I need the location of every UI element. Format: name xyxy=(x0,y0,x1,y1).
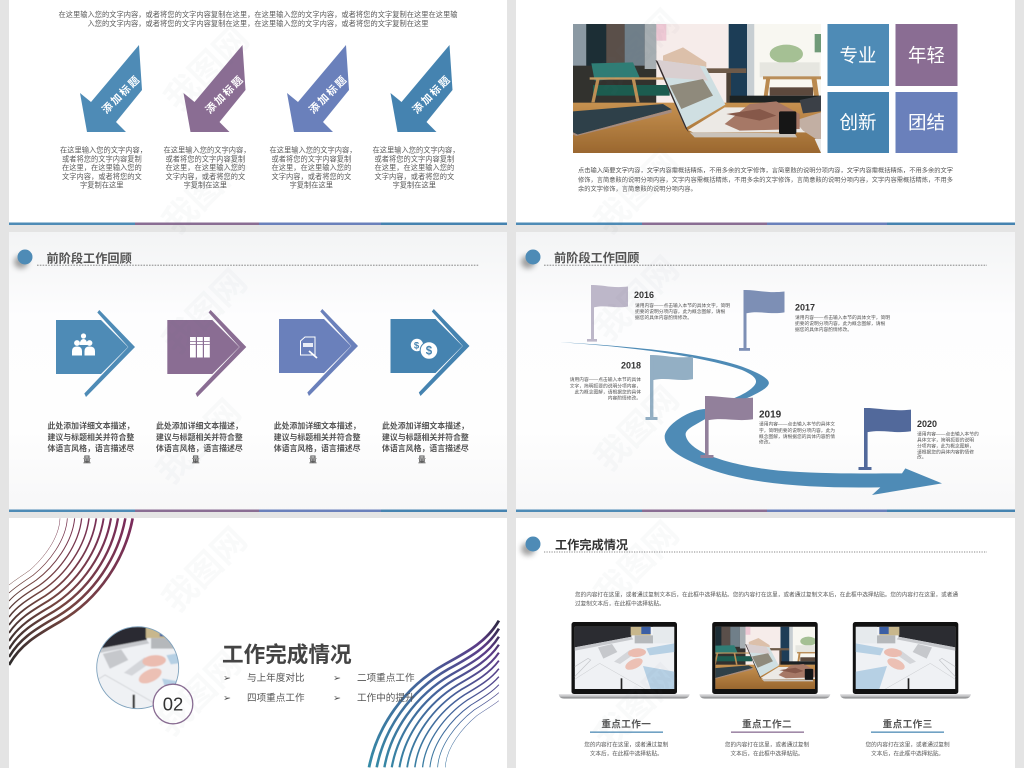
text 2017 xyxy=(795,302,890,333)
arrow 3 caption: 文字内容，或者将您的文 xyxy=(272,172,351,181)
text 2016: 2016 xyxy=(634,290,654,300)
watermark: 我图网 xyxy=(156,521,255,620)
text 2017: 2017 xyxy=(795,302,815,312)
arrow 1 caption xyxy=(60,146,147,190)
bullet list: 工作中的提升 xyxy=(357,692,415,704)
arrow 2 caption: 在这里，在这里输入您的 xyxy=(166,163,245,172)
item 2 label: 文本后，在此框中选择粘贴。 xyxy=(731,750,803,758)
tile: 创新 xyxy=(828,92,889,153)
arrow 3 caption: 在这里输入您的文字内容， xyxy=(270,146,357,154)
arrow 3 caption: 在这里，在这里输入您的 xyxy=(272,163,351,172)
text 2017: 扼要的说明分项内容，此为概念图解，请根 xyxy=(795,320,886,327)
arrow 4 caption: 或者将您的文字内容复制 xyxy=(374,154,454,164)
arrow 2 caption: 体语言风格，语言描述尽 xyxy=(156,443,243,453)
watermark: 我图网 xyxy=(156,143,255,242)
arrow 3 caption xyxy=(274,420,361,464)
arrow 2 with binders icon xyxy=(167,310,246,397)
arrow 1 with people icon xyxy=(56,310,135,397)
arrow 3 caption: 字复制在这里 xyxy=(290,180,333,190)
description text: 修饰，言简意赅的说明分项内容，文字内容需概括精炼，不用多余的文字修饰，言简意赅的说明分项内容，文字内容需概括精炼，不用多 xyxy=(578,175,953,184)
panel: slide 3, arrows with icons xyxy=(9,232,507,512)
laptop 1 xyxy=(559,622,690,698)
text 2017: 请用内容——点击输入本节的具体文字，简明 xyxy=(795,314,890,321)
text 2018: 此为概念图解，请根据您的具体 xyxy=(574,388,641,395)
watermark xyxy=(150,3,687,757)
watermark: 我图网 xyxy=(588,143,687,242)
text 2016: 请用内容——点击输入本节的具体文字，简明 xyxy=(635,302,730,309)
text 2018 xyxy=(570,360,641,401)
bullet list: 与上年度对比 xyxy=(247,672,305,684)
intro text: 过复制文本后，在此框中选择粘贴。 xyxy=(575,600,665,608)
heading marker xyxy=(521,536,540,556)
arrow 4 xyxy=(390,45,454,132)
tile: 专业: 专业 xyxy=(839,45,877,66)
watermark: 我图网 xyxy=(588,250,687,349)
heading marker xyxy=(14,250,32,268)
watermark: 我图网 xyxy=(158,20,257,119)
icon: binders xyxy=(190,337,210,358)
arrow 4 caption: 在这里输入您的文字内容， xyxy=(372,146,460,154)
text 2018: 文字，简明扼要的说明分项内容， xyxy=(570,382,641,389)
flag 2019 xyxy=(700,396,753,458)
heading: 前阶段工作回顾 xyxy=(554,250,639,265)
text 2019: 修改。 xyxy=(759,438,773,446)
text 2016 xyxy=(634,290,730,321)
arrow 3 caption: 体语言风格，语言描述尽 xyxy=(274,443,361,453)
arrow 3 xyxy=(287,45,350,132)
arrow 4 with coins icon xyxy=(390,309,470,396)
text 2020: 请根据您的具体内容酌情修 xyxy=(917,448,974,455)
arrow 2 caption: 量 xyxy=(192,456,200,464)
arrow 2 caption: 此处添加详细文本描述， xyxy=(156,420,243,430)
item 3 label: 文本后，在此框中选择粘贴。 xyxy=(871,750,944,758)
arrow 3 caption: 量 xyxy=(309,456,317,464)
heading marker xyxy=(521,250,540,268)
arrow 4 caption xyxy=(382,420,469,464)
text 2019: 2019 xyxy=(759,410,782,420)
tile: 年轻 xyxy=(896,24,958,86)
intro text xyxy=(58,10,458,28)
bullet list xyxy=(223,672,415,704)
arrow 1 caption: 体语言风格，语言描述尽 xyxy=(48,443,134,453)
arrow 2 caption xyxy=(156,420,243,464)
watermark: 我图网 xyxy=(150,645,249,744)
bullet list: 四项重点工作 xyxy=(247,692,305,704)
arrow 4 caption: 建议与标题相关并符合整 xyxy=(382,432,469,442)
section number: 02 xyxy=(163,694,183,714)
arrow 1 xyxy=(80,45,143,132)
arrow 4 caption: 字复制在这里 xyxy=(392,180,436,190)
text 2020: 分项内容，此为概念图解， xyxy=(917,442,974,449)
watermark: 我图网 xyxy=(588,3,687,102)
text 2018: 请用内容——点击输入本节的具体 xyxy=(570,376,641,383)
arrow 1 caption: 或者将您的文字内容复制 xyxy=(62,154,142,164)
arrow 2: 添加标题 xyxy=(203,72,247,116)
bullet list: ➢ xyxy=(333,693,341,704)
decorative wave lines bottom right xyxy=(369,621,499,767)
arrow 3: 添加标题 xyxy=(306,72,350,116)
laptop 2 xyxy=(699,622,830,698)
section title: 工作完成情况 xyxy=(222,642,352,667)
arrow 3 caption: 此处添加详细文本描述， xyxy=(274,420,361,430)
item 2 label xyxy=(725,718,809,758)
arrow 1 caption: 字复制在这里 xyxy=(80,180,124,190)
arrow 3 caption xyxy=(270,146,357,190)
tile: 专业 xyxy=(828,24,889,86)
watermark: 我图网 xyxy=(156,263,255,362)
arrow 2 xyxy=(184,45,247,132)
section number xyxy=(153,684,193,724)
item 1 label xyxy=(584,718,669,758)
tile: 团结: 团结 xyxy=(908,112,945,133)
arrow 1 caption xyxy=(48,420,134,464)
arrow 1 caption: 在这里，在这里输入您的 xyxy=(62,163,142,172)
flag 2017 xyxy=(739,290,784,351)
intro text xyxy=(575,591,958,608)
text 2018: 内容酌情修改。 xyxy=(608,394,641,401)
text 2016: 据您的具体内容酌情修改。 xyxy=(635,314,692,321)
tile: 年轻: 年轻 xyxy=(908,45,945,66)
item 3 label xyxy=(866,718,950,758)
bullet list: ➢ xyxy=(223,673,231,684)
arrow 3 with document icon xyxy=(279,309,358,396)
text 2020: 请用内容——点击输入本节的 xyxy=(917,430,979,437)
watermark: 我图网 xyxy=(150,393,249,492)
watermark: 我图网 xyxy=(588,380,687,479)
arrow 2 caption: 文字内容，或者将您的文 xyxy=(166,172,245,181)
item 1 label: 重点工作一 xyxy=(601,718,651,730)
arrow 1 caption: 文字内容，或者将您的文 xyxy=(62,172,142,181)
arrow 4 caption: 文字内容，或者将您的文 xyxy=(374,172,454,181)
text 2020: 改。 xyxy=(917,454,927,460)
arrow 3 caption: 建议与标题相关并符合整 xyxy=(274,432,361,442)
intro text: 入您的文字内容，或者将您的文字内容复制在这里，在这里输入您的文字内容，或者将您的文字复制在这里 xyxy=(88,19,428,28)
curved road arrow xyxy=(532,341,942,495)
panel: slide 6, work status xyxy=(516,518,1015,768)
flag 2020 xyxy=(858,408,911,470)
icon: people xyxy=(72,333,95,356)
description text xyxy=(578,166,953,193)
arrow 4 caption: 量 xyxy=(418,456,426,464)
arrow 2 caption xyxy=(164,146,251,190)
tile: 创新: 创新 xyxy=(839,112,877,133)
arrow 2 caption: 在这里输入您的文字内容， xyxy=(164,146,251,154)
text 2019: 请用内容——点击输入本节的具体文 xyxy=(759,420,835,428)
item 1 label: 文本后，在此框中选择粘贴。 xyxy=(590,750,663,758)
bullet list: ➢ xyxy=(223,693,231,704)
item 2 label: 您的内容打在这里，或者通过复制 xyxy=(725,740,809,748)
arrow 4 caption: 体语言风格，语言描述尽 xyxy=(382,443,469,453)
arrow 4 caption: 此处添加详细文本描述， xyxy=(382,420,469,430)
item 2 label: 重点工作二 xyxy=(742,718,792,730)
text 2020: 2020 xyxy=(917,419,937,429)
text 2018: 2018 xyxy=(621,360,641,370)
circular photo xyxy=(96,626,180,710)
arrow 1 caption: 量 xyxy=(83,456,91,464)
panel: slide 2, photo and values xyxy=(516,0,1015,225)
arrow 2 caption: 或者将您的文字内容复制 xyxy=(166,154,245,164)
arrow 1 caption: 此处添加详细文本描述， xyxy=(48,420,134,430)
flag 2018 xyxy=(646,355,693,420)
arrow 4: 添加标题 xyxy=(410,72,454,116)
text 2019 xyxy=(759,410,835,446)
panel: slide 1, four arrows xyxy=(9,0,507,225)
heading: 工作完成情况 xyxy=(555,537,628,552)
icon: coins: $ xyxy=(426,346,433,358)
intro text: 在这里输入您的文字内容，或者将您的文字内容复制在这里，在这里输入您的文字内容，或者将您的文字复制在这里在这里输 xyxy=(58,10,458,19)
watermark: 我图网 xyxy=(588,515,687,614)
arrow 1 caption: 在这里输入您的文字内容， xyxy=(60,146,147,154)
heading: 前阶段工作回顾 xyxy=(46,250,132,266)
arrow 4 caption xyxy=(372,146,460,190)
arrow 2 caption: 字复制在这里 xyxy=(184,180,227,190)
text 2019: 概念图解，请根据您的具体内容酌情 xyxy=(759,433,835,440)
item 3 label: 您的内容打在这里，或者通过复制 xyxy=(866,740,950,748)
item 1 label: 您的内容打在这里，或者通过复制 xyxy=(584,740,669,748)
decorative wave lines top left xyxy=(9,518,133,665)
text 2016: 扼要的说明分项内容，此为概念图解，请根 xyxy=(635,308,726,315)
photo: laptop on cafe table xyxy=(573,24,821,153)
text 2020: 具体文字，简明扼要的说明 xyxy=(917,436,974,443)
flag 2016 xyxy=(587,285,628,342)
arrow 1 caption: 建议与标题相关并符合整 xyxy=(48,432,134,442)
arrow 4 caption: 在这里，在这里输入您的 xyxy=(374,163,454,172)
tile: 团结 xyxy=(896,92,958,153)
icon: document and magnifier xyxy=(300,337,317,358)
text 2020 xyxy=(917,419,979,460)
bullet list: ➢ xyxy=(333,673,341,684)
text 2019: 字，简明扼要的说明分项内容，此为 xyxy=(759,427,835,434)
watermark: 我图网 xyxy=(588,658,687,757)
icon: coins xyxy=(411,339,438,359)
bullet list: 二项重点工作 xyxy=(357,672,415,684)
item 3 label: 重点工作三 xyxy=(883,718,933,730)
arrow 3 caption: 或者将您的文字内容复制 xyxy=(272,154,351,164)
description text: 余的文字修饰，言简意赅的说明分项内容。 xyxy=(578,184,697,193)
laptop 3 xyxy=(840,622,971,698)
description text: 点击输入简要文字内容，文字内容需概括精炼，不用多余的文字修饰，言简意赅的说明分项内容，文字内容需概括精炼，不用多余的文字 xyxy=(578,166,953,174)
icon: coins: $ xyxy=(414,340,420,352)
panel: slide 5, section cover xyxy=(9,518,507,768)
intro text: 您的内容打在这里，或者通过复制文本后，在此框中选择粘贴。您的内容打在这里，或者通过复制文本后，在此框中选择粘贴。您的内容打在这里，或者通 xyxy=(575,591,958,599)
arrow 2 caption: 建议与标题相关并符合整 xyxy=(156,432,243,442)
text 2017: 据您的具体内容酌情修改。 xyxy=(795,326,852,333)
arrow 1: 添加标题 xyxy=(99,72,143,116)
panel: slide 4, timeline xyxy=(516,232,1015,512)
